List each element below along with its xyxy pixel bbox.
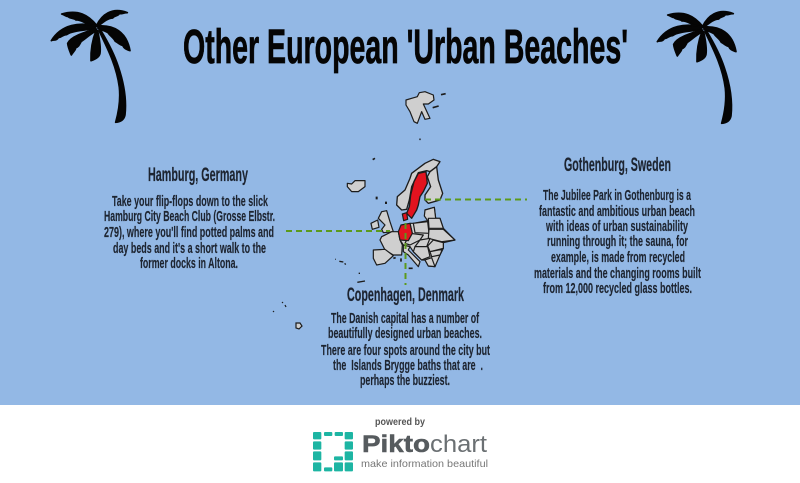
map: western Balkans: [413, 247, 430, 260]
map: Ireland: [371, 220, 379, 229]
map: Baltic states: [424, 207, 436, 221]
map: Germany (highlighted): [398, 223, 412, 241]
body: Hamburg: Take your flip-flops down to the slick: [112, 193, 268, 210]
body: Gothenburg: with ideas of urban sustainability: [545, 218, 688, 235]
map: Hungary and Slovakia: [415, 238, 430, 247]
map: Norway: [397, 159, 440, 210]
Piktochart wordmark light part: chart: [430, 431, 487, 458]
map: Italy: [403, 245, 420, 267]
body: Gothenburg: running through it; the sauna, for: [547, 233, 688, 250]
body: Hamburg: 279), where you'll find potted palms and: [104, 224, 274, 241]
tagline: make information beautiful: [361, 458, 488, 470]
icon: right palm tree: [657, 12, 736, 123]
footer band: [0, 405, 800, 483]
body: Copenhagen: There are four spots around the city but: [321, 342, 490, 359]
map: Scandinavia: [397, 159, 443, 218]
map: Ukraine: [428, 229, 455, 242]
text block: Gothenburg: [534, 155, 701, 297]
body: Gothenburg: [534, 187, 701, 297]
footer: Piktochart branding: [313, 417, 488, 471]
map: northern islands and Iceland: [335, 92, 446, 282]
body: Hamburg: former docks in Altona.: [140, 255, 238, 272]
map: Spain and Portugal: [373, 249, 393, 265]
map: Belarus: [428, 218, 443, 228]
map: Romania: [428, 240, 443, 252]
body: Gothenburg: from 12,000 recycled glass bottles.: [543, 280, 692, 297]
body: Gothenburg: example, is made from recycled: [551, 249, 685, 266]
body: Copenhagen: perhaps the buzziest.: [360, 372, 450, 389]
map: small Arctic islands: [373, 94, 446, 160]
map: Svalbard: [406, 92, 434, 123]
icon: left palm tree: [51, 11, 130, 122]
map: eastern Europe landmass: [400, 207, 455, 267]
body: Hamburg: Hamburg City Beach Club (Grosse Elbstr.: [104, 208, 275, 225]
body: Copenhagen: the Islands Brygge baths that are .: [333, 357, 483, 374]
body: Hamburg: day beds and it's a short walk to the: [113, 240, 266, 257]
heading: Copenhagen: Copenhagen, Denmark: [347, 285, 464, 306]
map: Mediterranean islands: [393, 258, 413, 268]
connector: Copenhagen: [404, 223, 406, 285]
map: France: [380, 232, 402, 255]
map: Denmark (highlighted): [402, 213, 408, 221]
map: Sweden (highlighted): [407, 172, 427, 218]
body: Copenhagen: [321, 310, 490, 389]
body: Hamburg: [104, 193, 275, 272]
map: Bulgaria: [430, 249, 442, 257]
text block: Copenhagen: [321, 285, 490, 389]
heading: Hamburg: Hamburg, Germany: [148, 165, 248, 186]
body: Gothenburg: fantastic and ambitious urban beach: [539, 203, 695, 220]
map: Poland: [413, 222, 429, 233]
map: Azores islands: [273, 302, 302, 329]
body: Copenhagen: beautifully designed urban beaches.: [328, 325, 482, 342]
heading: Gothenburg: Gothenburg, Sweden: [564, 155, 671, 176]
map: Finland: [425, 167, 443, 203]
connector: Hamburg: [286, 230, 390, 232]
map: Faroe and Shetland islands: [377, 197, 386, 204]
Piktochart wordmark: Pikto: [362, 431, 430, 458]
icon: Piktochart logo: [313, 432, 353, 471]
body: Gothenburg: The Jubilee Park in Gothenburg is a: [543, 187, 691, 204]
connector: Gothenburg: [425, 198, 527, 200]
map: Iceland: [347, 181, 365, 192]
powered by label: powered by: [375, 417, 425, 428]
body: Copenhagen: The Danish capital has a number of: [331, 310, 480, 327]
map: Atlantic islands: [335, 259, 365, 282]
map: Czechia and Austria: [405, 233, 423, 245]
map: Greece: [425, 258, 435, 267]
text block: Hamburg: [104, 165, 275, 272]
map: Great Britain: [378, 211, 393, 233]
map: continental Europe: [371, 207, 455, 268]
